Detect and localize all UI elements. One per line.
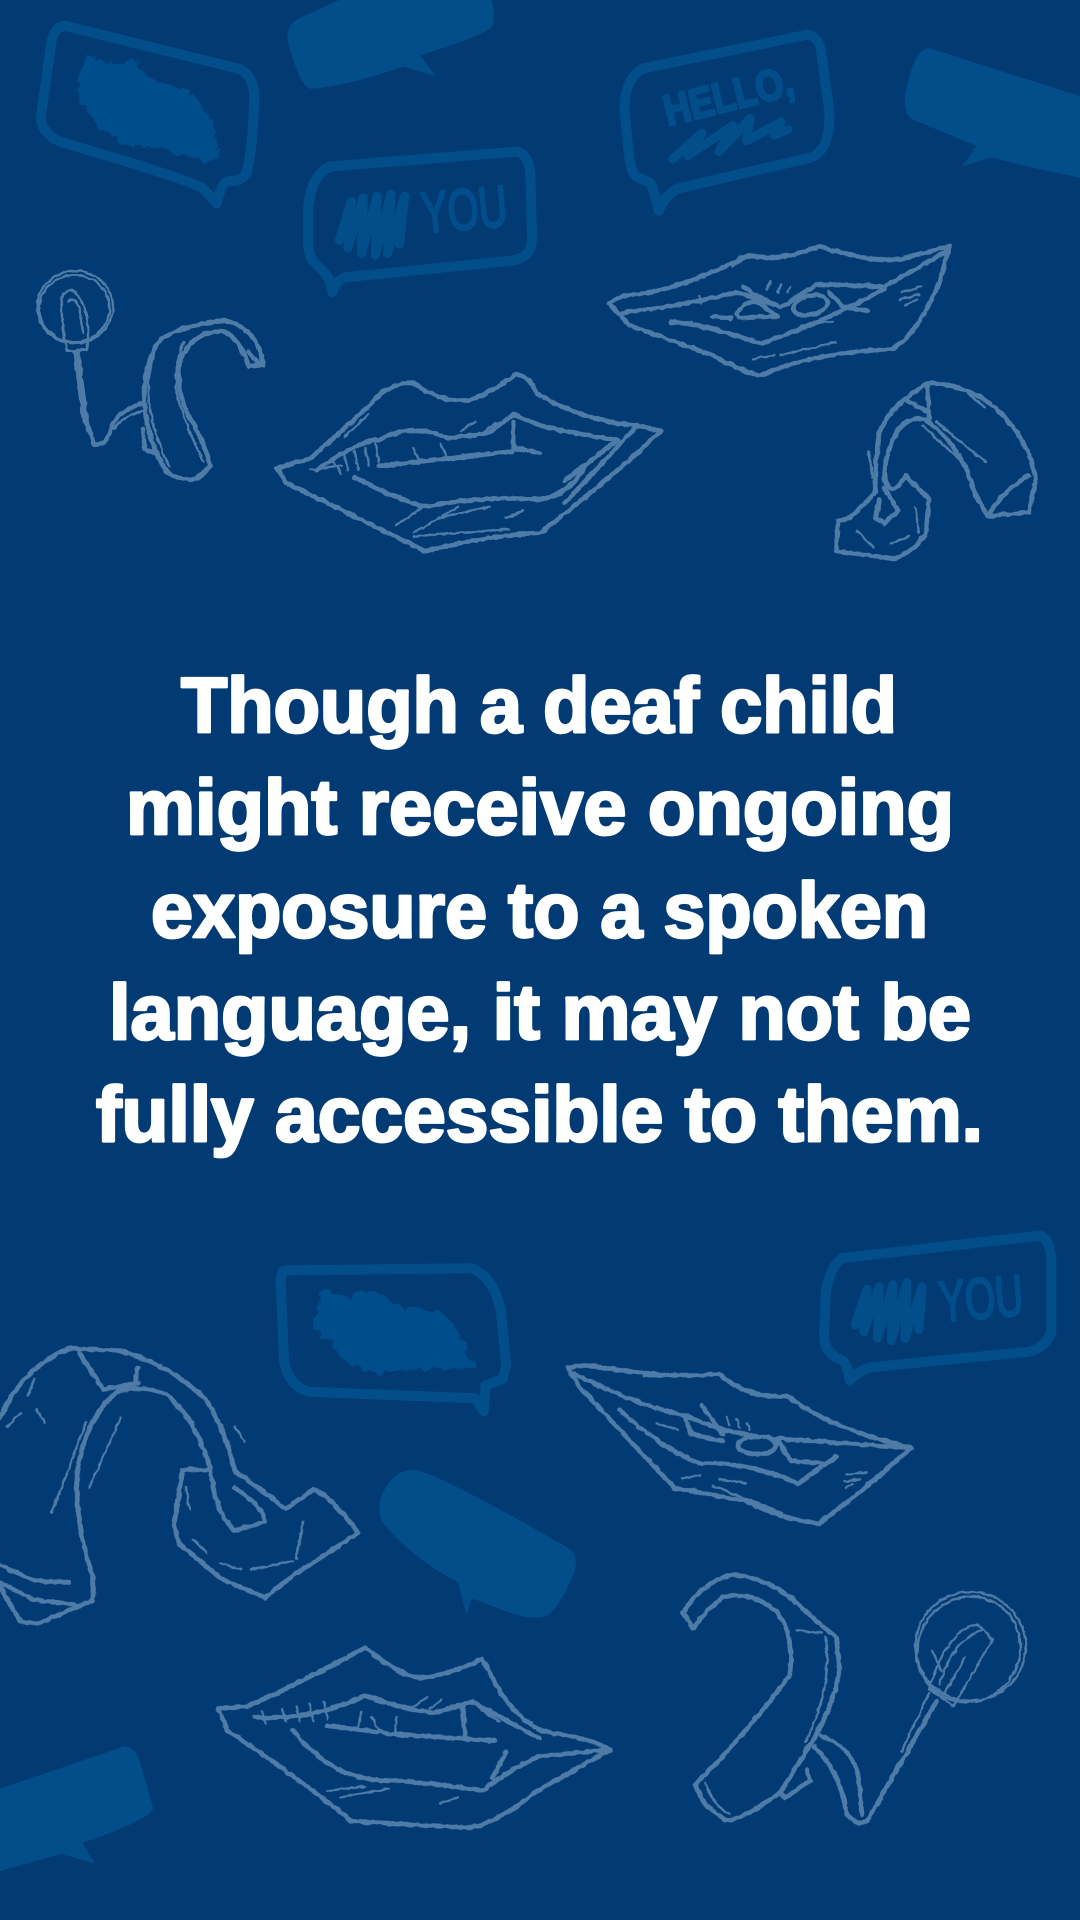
speech bubble: outline with scribble and YOU — [308, 152, 532, 292]
icon: lips, top centre — [277, 374, 661, 551]
headline text block: fully accessible to them. — [96, 1070, 983, 1158]
speech bubble: outline with scribble and YOU, lower right — [824, 1236, 1051, 1381]
speech bubble: outlined with scribble, lower left — [281, 1268, 506, 1411]
speech bubble: outline with scribble and YOU, lower right: YOU — [936, 1263, 1026, 1335]
speech bubble: solid, top right — [905, 48, 1080, 178]
speech bubble: solid, bottom left — [0, 1747, 153, 1871]
icon: lips, lower right — [568, 1365, 912, 1524]
icon: cochlear implant, top left — [37, 271, 263, 479]
headline text block: exposure to a spoken — [151, 866, 928, 954]
speech bubble: solid, lower centre — [380, 1470, 576, 1618]
headline text block: language, it may not be — [109, 968, 971, 1056]
speech bubble: outline with scribble and YOU: YOU — [418, 174, 510, 246]
headline text block: might receive ongoing — [126, 763, 954, 851]
icon: lips, bottom centre — [219, 1648, 610, 1828]
speech bubble: solid, top centre — [287, 0, 494, 89]
icon: hearing aid, top right — [836, 383, 1036, 559]
icon: hearing aid, lower left — [0, 1348, 358, 1624]
icon: cochlear implant, lower right — [683, 1575, 1026, 1823]
headline text block — [96, 661, 983, 1158]
speech bubble: outlined with scribble, top left — [41, 26, 254, 203]
headline text block: Though a deaf child — [181, 661, 897, 749]
speech bubble: outline with HELLO and scribble — [624, 35, 829, 211]
speech bubble: outline with HELLO and scribble: HELLO, — [659, 57, 798, 136]
icon: lips, top right — [609, 246, 950, 375]
